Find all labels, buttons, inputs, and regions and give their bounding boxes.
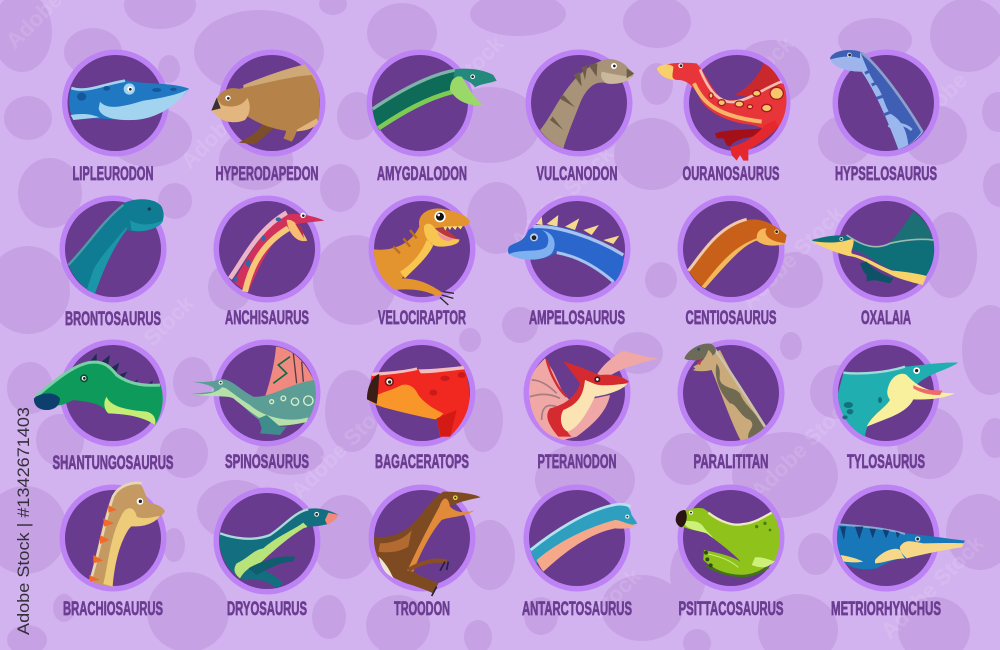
text: Adobe Stock [286,390,399,504]
text: Adobe Stock [86,290,199,404]
card: Centiosaurus [678,196,787,329]
dinosaur: Psittacosaurus [676,508,780,576]
label: Paralititan: PARALITITAN [694,452,768,473]
card: Velociraptor [368,196,476,329]
card: Bagaceratops [367,340,476,473]
dinosaur: Velociraptor [374,209,470,305]
dinosaur: Anchisaurus [230,213,324,292]
label: Pteranodon: PTERANODON [538,452,616,473]
ring: Pteranodon [524,340,630,446]
ring: Centiosaurus [678,196,784,302]
dinosaur: Ampelosaurus [508,215,624,282]
ring: Anchisaurus [214,196,320,302]
card: Paralititan [678,340,784,473]
text: Stock [586,563,646,624]
card: Amygdalodon [366,50,497,185]
card: Spinosaurus [192,340,320,473]
dinosaur: Centiosaurus [688,219,787,288]
ring: Paralititan [678,340,784,446]
card: Ampelosaurus [508,196,630,329]
label: Lipleurodon: LIPLEURODON [72,164,154,185]
label: Anchisaurus: ANCHISAURUS [225,308,309,329]
text: Adobe Stock [876,530,989,644]
card: Vulcanodon [526,50,634,185]
label: Hyperodapedon: HYPERODAPEDON [216,164,318,185]
ring: Lipleurodon [62,50,169,156]
dinosaur: Bagaceratops [367,366,469,437]
card: Brontosaurus [60,196,166,330]
dinosaur: Vulcanodon [540,59,634,148]
text: Adobe Stock [686,30,799,144]
dinosaur: Troodon [374,492,481,596]
card: Shantungosaurus [34,340,174,474]
label: Tylosaurus: TYLOSAURUS [847,452,925,473]
card: Metriorhynchus [831,484,965,620]
text: Adobe Stock [396,30,509,144]
card: Tylosaurus [832,340,958,473]
ring: Psittacosaurus [678,484,784,592]
label: Brachiosaurus: BRACHIOSAURUS [63,599,163,620]
card: Pteranodon [524,340,658,473]
dinosaur: Brontosaurus [68,199,164,293]
ring: Velociraptor [368,196,476,302]
label: Spinosaurus: SPINOSAURUS [225,452,309,473]
card: Anchisaurus [214,196,324,329]
ring: Spinosaurus [214,340,320,446]
label: Antarctosaurus: ANTARCTOSAURUS [522,599,632,620]
label: Ouranosaurus: OURANOSAURUS [682,164,780,185]
card: Hypselosaurus [830,50,940,185]
dinosaur: Amygdalodon [373,69,497,131]
text: Adobe Stock [736,200,849,314]
ring: Shantungosaurus [60,340,166,446]
card: Troodon [368,484,481,620]
card: Oxalaia [812,196,940,329]
ring: Antarctosaurus [524,484,630,592]
dinosaur: Dryosaurus [219,508,339,588]
dinosaur: Antarctosaurus [530,504,637,572]
text: Adobe Stock [506,140,619,254]
ring: Brachiosaurus [60,484,166,592]
label: Ampelosaurus: AMPELOSAURUS [529,308,625,329]
stock credit: Adobe Stock | #1342671403 [14,407,33,635]
ring: Dryosaurus [214,488,320,594]
dinosaur: Hypselosaurus [830,50,923,149]
card: Hyperodapedon [211,50,326,185]
card: Dryosaurus [214,488,339,620]
ring: Hypselosaurus [832,50,940,156]
dinosaur: Ouranosaurus [657,63,787,161]
text: Adobe [906,67,972,134]
label: Centiosaurus: CENTIOSAURUS [686,308,776,329]
label: Shantungosaurus: SHANTUNGOSAURUS [52,453,174,474]
label: Dryosaurus: DRYOSAURUS [227,599,307,620]
ring: Vulcanodon [526,50,632,156]
dinosaur: Spinosaurus [192,347,316,435]
card: Antarctosaurus [522,484,637,620]
card: Psittacosaurus [676,484,784,620]
dinosaur: Metriorhynchus [837,524,965,569]
text: Adobe Stock [176,60,289,174]
label: Amygdalodon: AMYGDALODON [377,164,467,185]
text: Adobe Stock [746,390,859,504]
dinosaur: Lipleurodon [69,80,189,120]
dinosaur: Tylosaurus [838,362,958,437]
ring: Hyperodapedon [218,50,326,156]
label: Brontosaurus: BRONTOSAURUS [65,309,161,330]
label: Oxalaia: OXALAIA [861,308,911,329]
label: Troodon: TROODON [394,599,450,620]
dinosaur: Paralititan [684,344,765,441]
card: Lipleurodon [62,50,189,185]
ring: Brontosaurus [60,196,166,302]
card: Ouranosaurus [657,50,790,185]
dinosaur: Pteranodon [529,351,658,440]
dinosaur: Shantungosaurus [34,353,163,425]
ring: Ouranosaurus [684,50,790,156]
ring: Metriorhynchus [832,484,940,592]
ring: Troodon [368,484,476,592]
label: Velociraptor: VELOCIRAPTOR [378,308,466,329]
ring: Ampelosaurus [524,196,630,302]
dinosaur: Hyperodapedon [211,64,320,144]
ring: Oxalaia [832,196,940,302]
label: Vulcanodon: VULCANODON [536,164,618,185]
dinosaur: Oxalaia [812,212,934,285]
dinosaur: Brachiosaurus [89,483,165,587]
ring: Tylosaurus [832,340,940,446]
ring: Amygdalodon [366,50,474,156]
label: Psittacosaurus: PSITTACOSAURUS [678,599,784,620]
ring: Bagaceratops [368,340,476,446]
card: Brachiosaurus [60,483,166,620]
label: Bagaceratops: BAGACERATOPS [375,452,469,473]
